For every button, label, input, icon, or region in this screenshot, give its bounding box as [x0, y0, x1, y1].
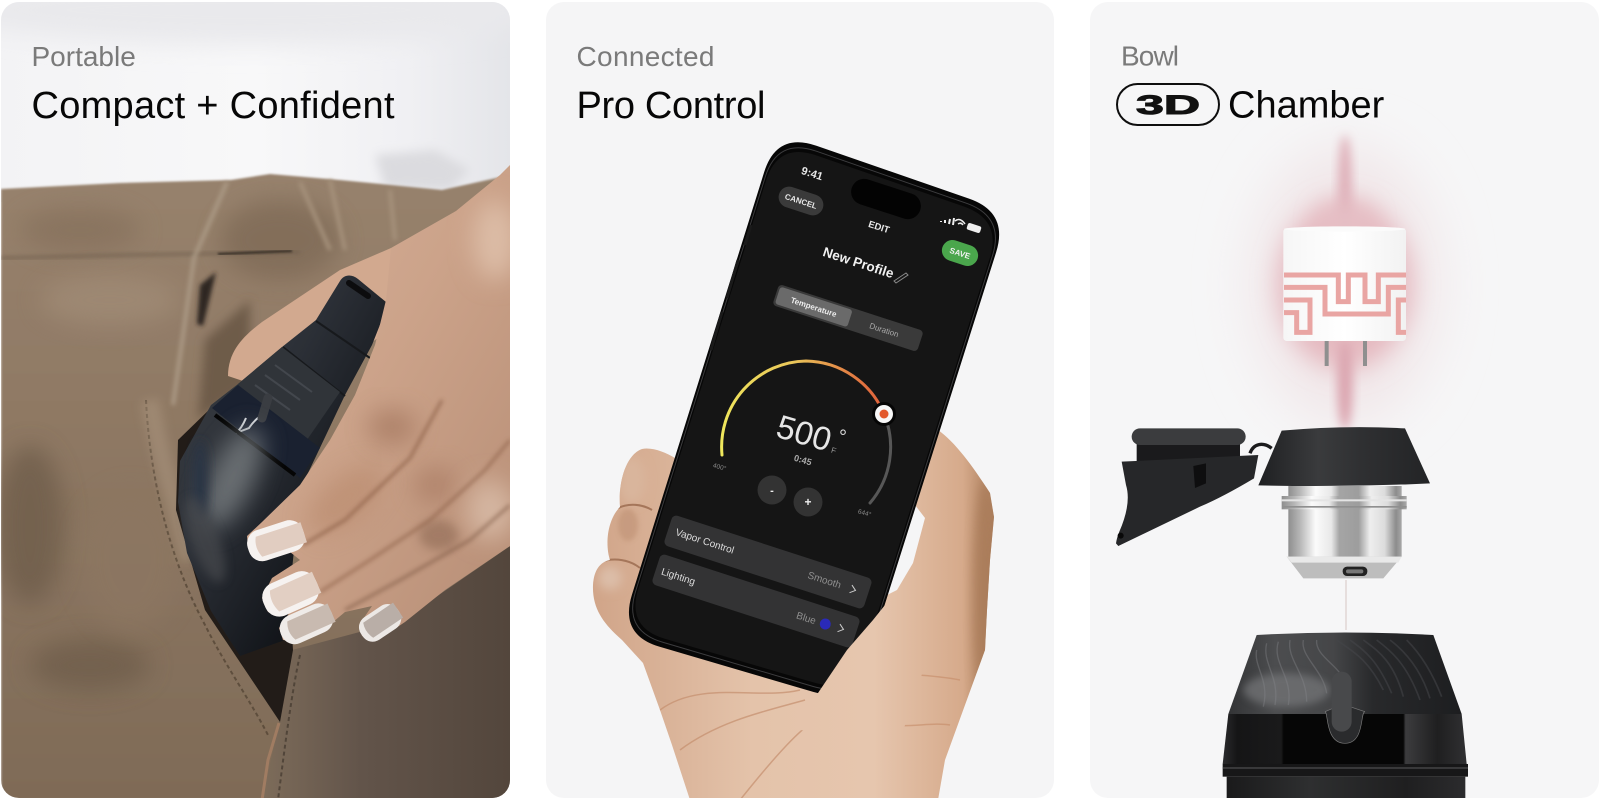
icon: pencil	[894, 273, 908, 283]
glossy band	[1223, 714, 1467, 764]
red heat glow	[1250, 135, 1440, 430]
row: vapor control	[663, 514, 873, 610]
lower right pants panel	[262, 546, 510, 800]
temperature gauge	[712, 361, 896, 519]
black cap	[1258, 427, 1430, 486]
segmented control	[772, 284, 924, 352]
temperature gauge: °	[835, 426, 849, 449]
temperature gauge: 644°	[857, 507, 872, 519]
temperature gauge: 0:45	[793, 453, 813, 467]
minus button: -	[770, 485, 774, 497]
nails	[243, 517, 406, 649]
cancel button	[778, 186, 824, 216]
segmented control: Temperature	[789, 296, 838, 319]
label: Connected: Connected	[576, 41, 714, 72]
device	[178, 275, 387, 656]
temperature gauge: 500	[773, 408, 836, 458]
phone	[629, 142, 999, 695]
label: Portable: Portable	[32, 41, 136, 72]
device highlight	[204, 417, 276, 536]
badge: 3D: 3D	[1136, 90, 1200, 120]
minus button	[758, 476, 786, 504]
row: lighting	[651, 553, 861, 649]
heading: Compact + Confident: Compact + Confident	[32, 85, 395, 127]
plus button	[794, 488, 822, 516]
steel chamber	[1282, 486, 1407, 578]
pocket opening shadow	[176, 400, 293, 722]
status bar: 9:41	[800, 165, 824, 183]
hand holding phone	[585, 425, 1000, 800]
panel background	[1090, 2, 1599, 798]
front of hand and fingers	[240, 160, 520, 650]
panel: bowl	[1090, 2, 1599, 800]
pins	[1325, 340, 1329, 366]
phone body	[629, 142, 999, 695]
device gloss band	[212, 385, 320, 466]
heading: Chamber: Chamber	[1228, 84, 1385, 126]
status bar	[800, 165, 982, 233]
panel background	[546, 2, 1054, 798]
hand behind device	[228, 248, 391, 380]
mouthpiece flip lid	[1116, 428, 1272, 546]
gap between phone and palm	[888, 506, 925, 594]
heater trace	[1284, 275, 1406, 332]
exploded assembly	[1116, 427, 1468, 800]
save button: SAVE	[948, 246, 972, 261]
temperature gauge: F	[830, 446, 837, 456]
device top	[1223, 632, 1468, 800]
profile name: New Profile	[821, 244, 896, 281]
panel: portable	[0, 0, 550, 800]
pocket seam and stitching	[262, 723, 279, 800]
photo: hand sliding device into pocket	[0, 0, 550, 800]
label: Bowl: Bowl	[1121, 40, 1179, 72]
row: lighting: Blue	[795, 610, 818, 627]
panel: connected	[546, 2, 1054, 800]
row: vapor control: Smooth	[806, 570, 842, 591]
row: vapor control: Vapor Control	[674, 527, 735, 557]
palm overlapping phone corner	[801, 606, 922, 730]
plus button: +	[804, 495, 812, 509]
save button	[942, 240, 978, 266]
airflow line	[1345, 580, 1347, 630]
heading: Pro Control: Pro Control	[576, 85, 766, 127]
segmented control: Duration	[868, 321, 900, 339]
cancel button: CANCEL	[784, 192, 818, 211]
ceramic heater	[1283, 226, 1406, 366]
slider	[1332, 672, 1352, 732]
temperature gauge: 400°	[712, 461, 727, 473]
edit label: EDIT	[867, 219, 891, 236]
lower ring and body	[1223, 764, 1468, 777]
badge: 3D	[1117, 84, 1219, 125]
row: lighting: Lighting	[660, 567, 696, 588]
